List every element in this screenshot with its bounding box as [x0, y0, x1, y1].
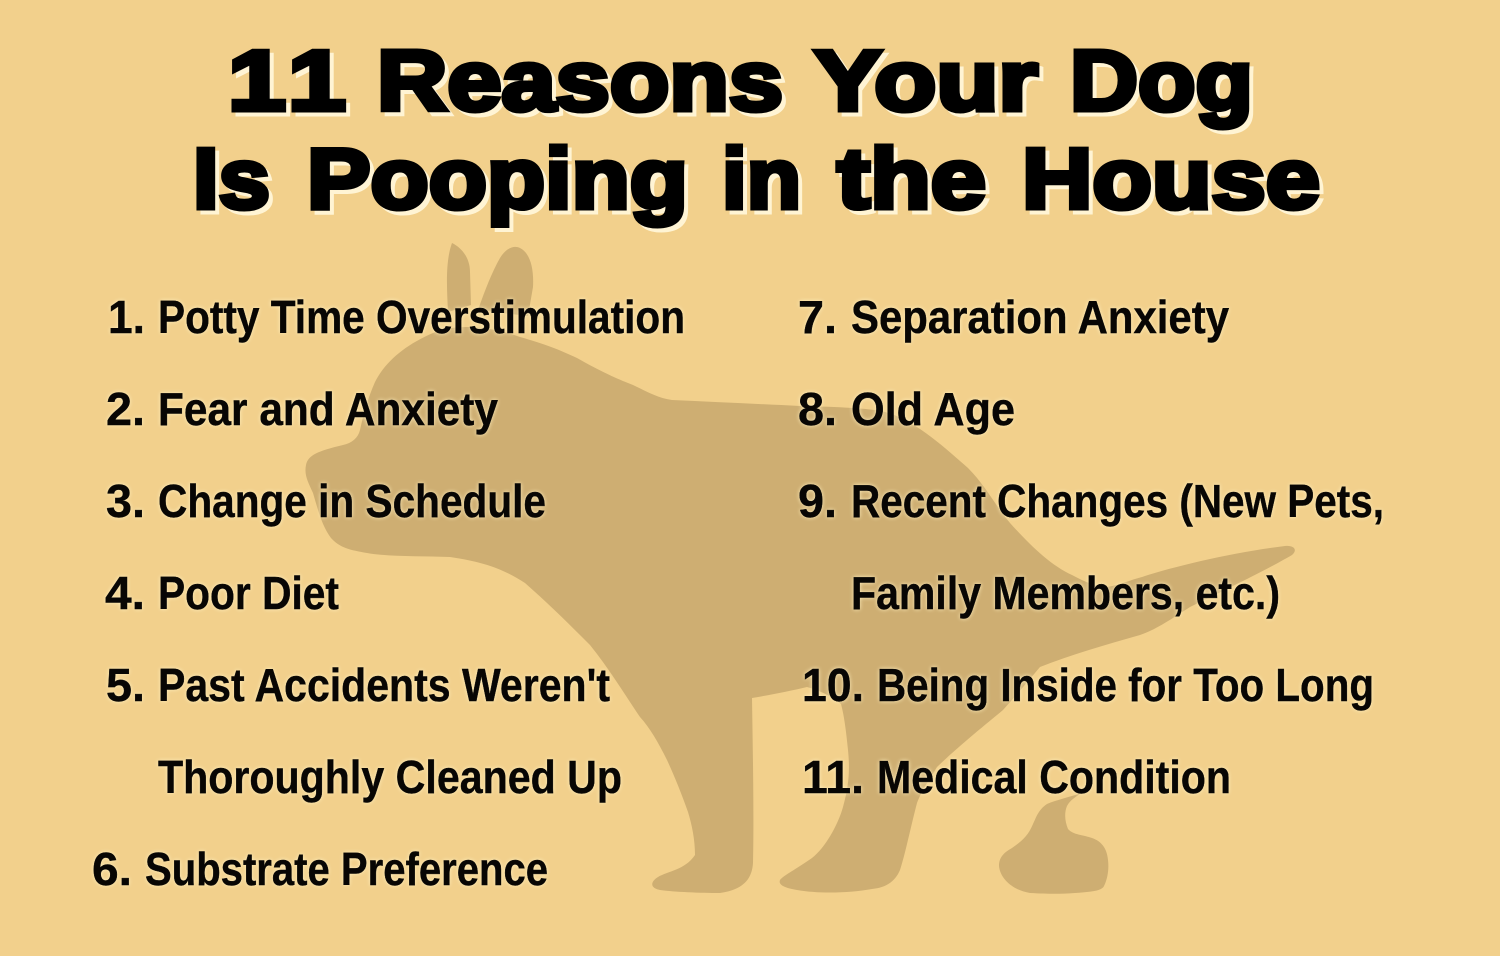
reason 5	[106, 659, 622, 803]
reason 2: Fear and Anxiety	[158, 383, 498, 435]
reason 6: Substrate Preference	[145, 843, 548, 895]
reason 4: Poor Diet	[158, 567, 339, 619]
reason 5: 5.	[106, 659, 145, 711]
reason 11: 11.	[802, 751, 864, 803]
reason 9	[798, 475, 1384, 619]
reason 7: Separation Anxiety	[851, 291, 1229, 343]
title: 1	[288, 34, 346, 129]
reason 2: 2.	[106, 383, 145, 435]
title: the	[837, 132, 986, 227]
reason 11: Medical Condition	[877, 751, 1231, 803]
reason 1: 1.	[108, 291, 145, 343]
reason 5: Past Accidents Weren't	[158, 659, 610, 711]
reason 10: Being Inside for Too Long	[877, 659, 1374, 711]
reason 6: 6.	[92, 843, 132, 895]
reason 10: 10.	[802, 659, 864, 711]
title: in	[722, 132, 801, 227]
reason 3: 3.	[106, 475, 145, 527]
reason 1: Potty Time Overstimulation	[158, 291, 685, 343]
list: left column reasons 1-6	[92, 291, 685, 895]
title: Pooping	[307, 132, 688, 227]
title: Your	[814, 34, 1038, 129]
reason 9: Family Members, etc.)	[851, 567, 1280, 619]
title: House	[1022, 132, 1320, 227]
title: Reasons	[377, 34, 783, 129]
reason 3: Change in Schedule	[158, 475, 546, 527]
icon: poop pile	[999, 793, 1108, 894]
title: Is	[193, 132, 270, 227]
title	[193, 34, 1320, 227]
reason 9: 9.	[798, 475, 837, 527]
icon: dog silhouette	[305, 243, 1295, 893]
reason 7: 7.	[798, 291, 837, 343]
reason 8: 8.	[798, 383, 837, 435]
title: Dog	[1070, 34, 1253, 129]
reason 8: Old Age	[851, 383, 1015, 435]
reason 5: Thoroughly Cleaned Up	[158, 751, 622, 803]
list: right column reasons 7-11	[798, 291, 1384, 803]
reason 4: 4.	[105, 567, 145, 619]
title: 1	[228, 34, 286, 129]
reason 9: Recent Changes (New Pets,	[851, 475, 1384, 527]
